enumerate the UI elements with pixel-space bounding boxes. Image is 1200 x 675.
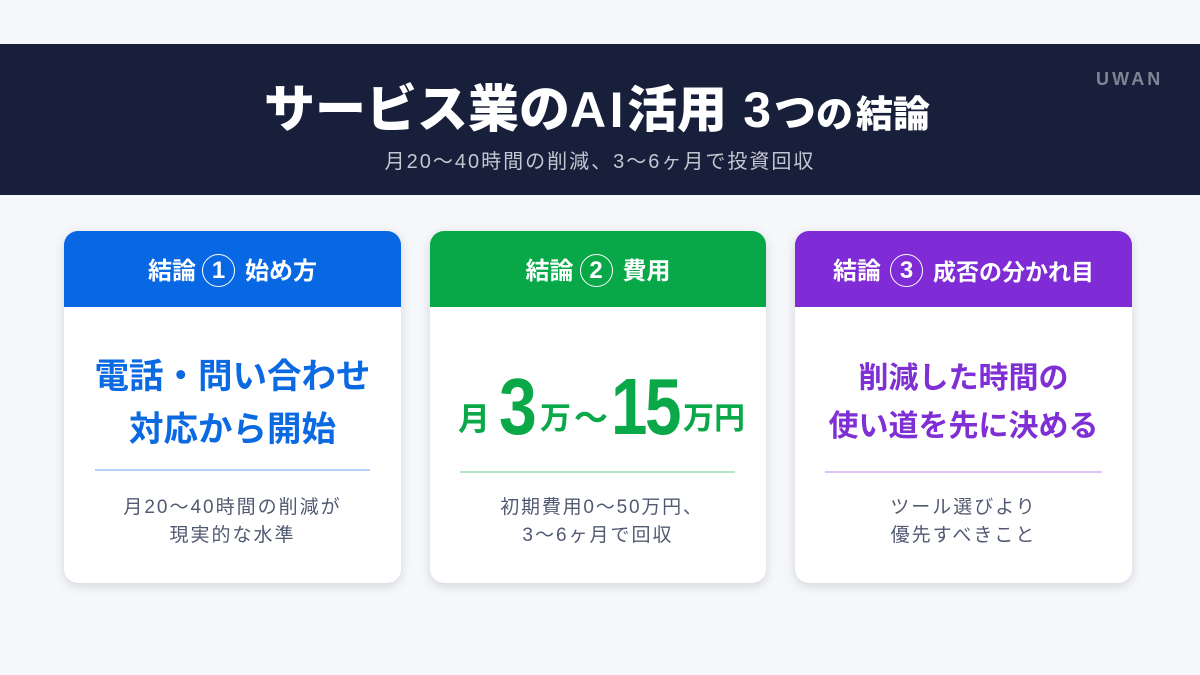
supporting text: conclusion 3: ツール選びより xyxy=(890,497,1037,518)
panel heading: conclusion 1 xyxy=(64,231,401,307)
key message: conclusion 3 xyxy=(828,362,1098,443)
supporting text: conclusion 3 xyxy=(890,497,1037,546)
panel heading: conclusion 1: 結論 xyxy=(148,258,196,285)
title: サービス業のAI活用 3つの結論 xyxy=(264,81,930,138)
panel heading: conclusion 2: 費用 xyxy=(622,258,670,285)
key message: conclusion 3: 削減した時間の xyxy=(858,362,1068,395)
panel heading: conclusion 3 xyxy=(795,231,1132,307)
key message: conclusion 2: 月 xyxy=(458,401,490,437)
supporting text: conclusion 1: 月20〜40時間の削減が xyxy=(123,497,342,518)
supporting text: conclusion 2: 3〜6ヶ月で回収 xyxy=(522,525,674,546)
panel: conclusion 1 xyxy=(64,231,401,583)
panel heading: conclusion 2 xyxy=(430,231,766,307)
key message: conclusion 2: 〜 xyxy=(574,400,608,438)
subtitle: 月20〜40時間の削減、3〜6ヶ月で投資回収 xyxy=(385,151,815,173)
divider: conclusion 2 xyxy=(460,471,735,473)
key message: conclusion 3: 使い道を先に決める xyxy=(828,410,1098,443)
divider: conclusion 1 xyxy=(95,469,370,471)
brand logo: UWAN xyxy=(1096,69,1163,89)
panel: conclusion 2 xyxy=(430,231,766,583)
panel heading: conclusion 2: 2 xyxy=(589,256,603,284)
key message: conclusion 2 xyxy=(458,362,745,451)
panel heading: conclusion 2: 結論 xyxy=(526,258,574,285)
panel heading: conclusion 1: 1 xyxy=(212,256,225,284)
key message: conclusion 1: 対応から開始 xyxy=(129,411,336,449)
supporting text: conclusion 2: 初期費用0〜50万円、 xyxy=(500,497,704,518)
supporting text: conclusion 3: 優先すべきこと xyxy=(891,525,1036,546)
key message: conclusion 1 xyxy=(94,358,370,449)
panel heading: conclusion 1: 始め方 xyxy=(245,258,317,285)
panel heading: conclusion 3: 成否の分かれ目 xyxy=(933,259,1094,285)
panel: conclusion 3 xyxy=(795,231,1132,583)
key message: conclusion 2: 万円 xyxy=(683,401,745,436)
supporting text: conclusion 2 xyxy=(500,497,704,546)
header banner xyxy=(0,44,1200,195)
key message: conclusion 2: 15 xyxy=(611,362,679,451)
key message: conclusion 1: 電話・問い合わせ xyxy=(94,358,370,396)
divider: conclusion 3 xyxy=(825,471,1102,473)
supporting text: conclusion 1 xyxy=(123,497,342,546)
panel heading: conclusion 3: 3 xyxy=(900,256,913,284)
key message: conclusion 2: 万 xyxy=(540,401,571,436)
key message: conclusion 2: 3 xyxy=(499,362,537,451)
panel heading: conclusion 3: 結論 xyxy=(833,258,881,285)
supporting text: conclusion 1: 現実的な水準 xyxy=(169,525,296,546)
